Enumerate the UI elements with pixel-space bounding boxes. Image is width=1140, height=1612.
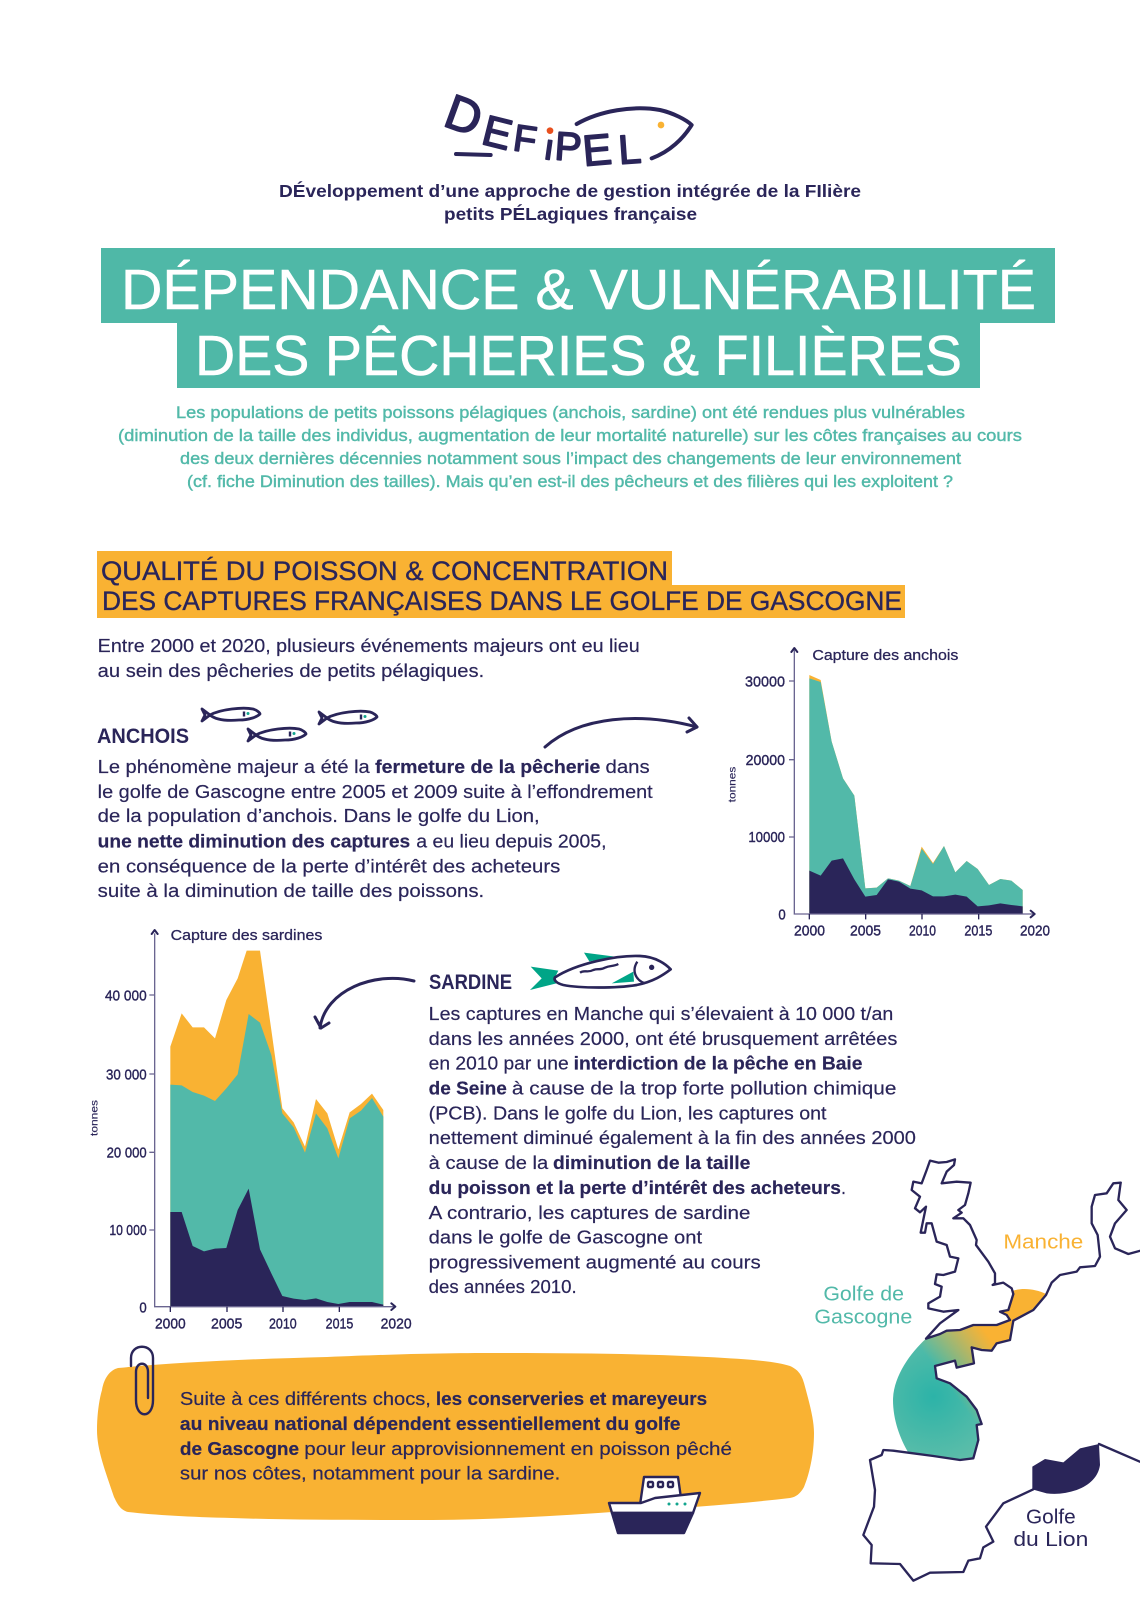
text: anchois [98,757,653,901]
map label: Golfe de Gascogne: Golfe de [823,1283,904,1306]
icon: sardine fish [530,953,671,990]
text: anchois: de la population d’anchois. Dans le golfe du Lion, [98,806,540,826]
text: sardine: progressivement augmenté au cours [429,1252,761,1272]
axis labels: anchovy: 2005 [850,922,881,939]
chart: capture des anchois [728,648,1050,939]
callout background [97,1353,814,1520]
axis labels: sardine: 2000 [155,1315,186,1332]
logo: DEFIPEL: ı [542,126,557,168]
arrow: to sardine chart [315,978,414,1028]
chart title: anchovy: Capture des anchois [812,648,958,664]
axis labels: sardine: 20 000 [107,1144,147,1161]
text: sardine: dans les années 2000, ont été brusquement arrêtées [429,1029,897,1049]
map label: Golfe de Gascogne: Gascogne [814,1305,912,1328]
axis labels: sardine: 10 000 [109,1222,147,1239]
map label: Golfe de Gascogne [814,1283,912,1328]
logo: DEFIPEL: E [581,126,614,176]
logo: DEFIPEL: F [511,116,539,161]
intro text [118,404,1022,491]
section intro text: Entre 2000 et 2020, plusieurs événements majeurs ont eu lieu [98,636,640,656]
logo: DEFIPEL: L [617,126,643,173]
callout text [180,1389,732,1484]
map label: Golfe du Lion: du Lion [1013,1528,1088,1551]
callout [97,1353,814,1520]
text: anchois: le golfe de Gascogne entre 2005 et 2009 suite à l’effondrement [98,782,653,802]
section heading: QUALITÉ DU POISSON & CONCENTRATION [101,556,668,586]
text: sardine: interdiction de la pêche en Baie [574,1054,862,1074]
chart: capture des sardines [90,928,412,1332]
text: anchois: Le phénomène majeur a été la [98,757,371,777]
orange series: anchovy [809,675,1023,914]
text: sardine: A contrario, les captures de sardine [429,1203,750,1223]
text: sardine: Les captures en Manche qui s’élevaient à 10 000 t/an [429,1004,893,1024]
axis labels: anchovy: 2015 [964,922,992,939]
axis labels: sardine [90,987,412,1332]
axis labels: anchovy: tonnes [728,767,739,802]
axis labels: sardine: 2010 [269,1315,297,1332]
map area: Golfe du Lion [1032,1444,1100,1494]
axis labels: sardine: 2005 [211,1315,242,1332]
logo: DEFIPEL: D [438,85,489,147]
map area: Golfe de Gascogne and Manche west [893,1320,1013,1460]
text: anchois: fermeture de la pêcherie [375,757,600,777]
map label: Golfe du Lion [1013,1505,1088,1551]
map outlines [863,1159,1140,1581]
text: anchois: dans [606,757,650,777]
axes: anchovy [789,648,1035,919]
axis labels: sardine: 30 000 [106,1066,147,1083]
callout text: pour leur approvisionnement en poisson pêché [304,1439,732,1459]
map [814,1159,1140,1581]
title banner [101,248,1055,388]
logo: DEFIPEL: E [478,106,517,160]
logo: DEFIPEL: P [553,124,583,170]
section intro text: au sein des pêcheries de petits pélagiques. [98,661,484,681]
section heading: DES CAPTURES FRANÇAISES DANS LE GOLFE DE GASCOGNE [102,586,902,616]
axes: sardine [149,930,395,1312]
heading: sardine: SARDINE [429,971,512,994]
chart title: sardine: Capture des sardines [171,928,322,944]
intro text: (diminution de la taille des individus, augmentation de leur mortalité naturelle) sur les côtes françaises au cours [118,427,1022,445]
title banner: DES PÊCHERIES & FILIÈRES [195,324,962,388]
icon: anchovy fish 3 [319,711,377,724]
callout text: sur nos côtes, notamment pour la sardine. [180,1464,560,1484]
text: sardine [429,1004,916,1297]
axis labels: sardine: 2015 [326,1315,353,1332]
text: sardine: diminution de la taille [553,1153,750,1173]
text: sardine: des années 2010. [429,1277,577,1297]
intro text: des deux dernières décennies notamment sous l’impact des changements de leur environnement [180,450,961,468]
text: sardine: à cause de la trop forte pollution chimique [512,1079,896,1099]
callout text: les conserveries et mareyeurs [436,1389,707,1409]
text: sardine: (PCB). Dans le golfe du Lion, les captures ont [429,1103,826,1123]
section intro text [98,636,640,681]
map area: Manche east [1000,1289,1046,1321]
axis labels: anchovy: 0 [778,906,786,923]
map label: Manche: Manche [1003,1230,1083,1253]
text: anchois: une nette diminution des captures [98,832,410,852]
axis labels: sardine: 2020 [381,1315,412,1332]
callout text: de Gascogne [180,1439,299,1459]
axis labels: anchovy: 2010 [909,922,936,939]
text: anchois: a eu lieu depuis 2005, [416,832,606,852]
text: sardine: dans le golfe de Gascogne ont [429,1228,702,1248]
icon: anchovy fish 1 [202,708,260,721]
icon: boat [609,1477,700,1533]
axis labels: anchovy: 2020 [1020,922,1050,939]
section heading [97,551,905,618]
callout text: Suite à ces différents chocs, [180,1389,431,1409]
axis labels: anchovy: 10000 [748,829,785,846]
logo: DEFIPEL [438,85,692,176]
text: sardine: en 2010 par une [429,1054,569,1074]
axis labels: sardine: 0 [139,1299,147,1316]
axis labels: sardine: 40 000 [105,987,147,1004]
teal series: sardine [170,1014,383,1307]
orange series: sardine [170,951,383,1307]
text: sardine: . [841,1178,846,1198]
navy series: anchovy [809,858,1023,914]
axis labels: anchovy: 20000 [746,752,785,769]
text: sardine: de Seine [429,1079,507,1099]
axis labels: anchovy: 30000 [745,674,785,691]
intro text: Les populations de petits poissons pélagiques (anchois, sardine) ont été rendues plus vulnérables [176,404,965,422]
axis labels: anchovy [728,674,1050,939]
logo subtitle: petits PÉLagiques française [444,203,697,224]
intro text: (cf. fiche Diminution des tailles). Mais qu’en est-il des pêcheurs et des filières qui les exploitent ? [187,473,953,491]
text: sardine: du poisson et la perte d’intérêt des acheteurs [429,1178,841,1198]
text: anchois: en conséquence de la perte d’intérêt des acheteurs [98,856,560,876]
text: anchois: suite à la diminution de taille des poissons. [98,881,484,901]
arrow: to anchovy chart [545,718,697,747]
logo subtitle [279,180,861,224]
teal series: anchovy [809,678,1023,914]
logo subtitle: DÉveloppement d’une approche de gestion intégrée de la FIlière [279,180,861,201]
icon: anchovy fish 2 [248,728,306,741]
axis labels: anchovy: 2000 [794,922,825,939]
icon: paperclip [131,1347,153,1414]
text: sardine: nettement diminué également à la fin des années 2000 [429,1128,916,1148]
axis labels: sardine: tonnes [90,1100,101,1136]
heading: anchois: ANCHOIS [97,725,189,748]
text: sardine: à cause de la [429,1153,549,1173]
map label: Golfe du Lion: Golfe [1026,1505,1076,1528]
callout text: au niveau national dépendent essentiellement du golfe [180,1414,680,1434]
title banner: DÉPENDANCE & VULNÉRABILITÉ [121,258,1036,322]
navy series: sardine [170,1189,383,1307]
